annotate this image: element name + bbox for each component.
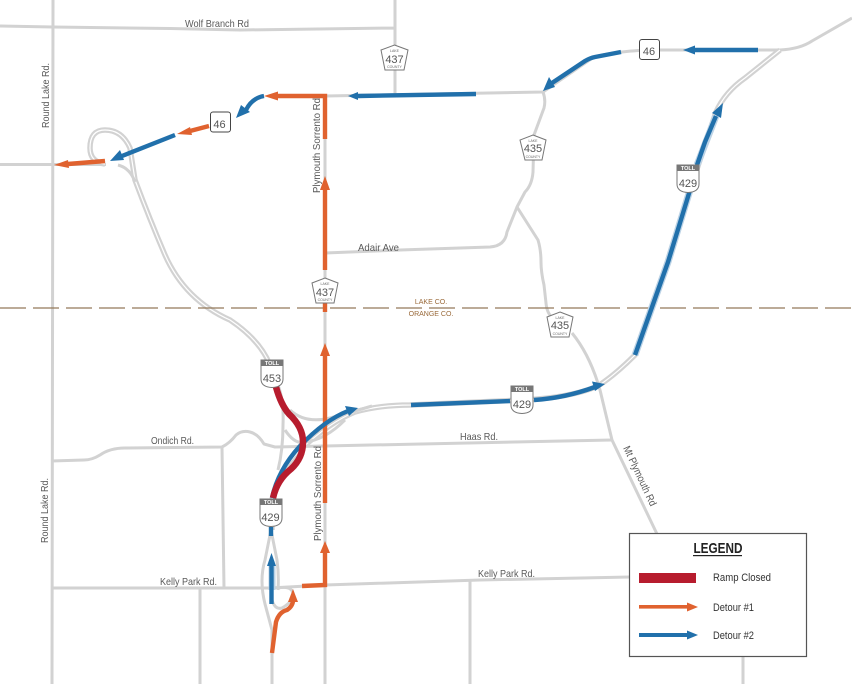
shield: SR 46 east: 46	[643, 46, 655, 58]
legend: detour 1: Detour #1	[713, 602, 754, 614]
road labels: Plymouth Sorrento Rd	[312, 446, 324, 541]
road labels: Wolf Branch Rd	[185, 18, 249, 30]
shield: 435 north	[520, 135, 546, 160]
shield: SR 46 west: 46	[213, 119, 226, 131]
shield: 435 north: 435	[524, 143, 542, 155]
shield: 437 south: 437	[316, 287, 334, 299]
road labels: Ondich Rd.	[151, 435, 194, 447]
county line label: Orange Co.: ORANGE CO.	[409, 311, 453, 318]
legend: ramp closed	[639, 572, 771, 584]
shield: toll 453	[261, 360, 283, 388]
shield: toll 429 northeast	[677, 165, 699, 192]
shield: toll 429 south: 429	[261, 512, 280, 524]
ramp closed route	[273, 387, 303, 498]
detour 1 route	[54, 92, 330, 653]
shield: toll 429 middle: TOLL	[515, 387, 530, 393]
shield: SR 46 west	[210, 112, 230, 132]
shield: toll 429 south: TOLL	[264, 500, 279, 506]
road labels: Round Lake Rd.	[39, 478, 51, 543]
legend: detour 2	[639, 630, 754, 642]
road labels: Kelly Park Rd.	[478, 568, 535, 580]
shield: toll 453: TOLL	[265, 361, 280, 367]
road labels: Kelly Park Rd.	[160, 576, 217, 588]
legend panel	[630, 534, 806, 656]
shield: toll 429 middle: 429	[513, 399, 531, 411]
shield: toll 429 northeast: TOLL	[681, 166, 696, 172]
legend heading: LEGEND	[694, 540, 743, 557]
shield: 435 south: COUNTY	[553, 332, 568, 336]
shield: toll 453: 453	[263, 373, 281, 385]
road labels: Round Lake Rd.	[40, 63, 52, 128]
road labels: Plymouth Sorrento Rd	[311, 98, 323, 193]
shield: 437 south: LAKE	[321, 282, 330, 286]
toll road ramps	[90, 50, 780, 684]
shield: 437 north: COUNTY	[387, 65, 403, 69]
shield: 435 south: LAKE	[556, 316, 565, 320]
shield: 437 north: 437	[385, 54, 404, 66]
shield: toll 429 middle	[511, 386, 533, 414]
shield: 435 north: LAKE	[529, 139, 538, 143]
road labels	[39, 18, 659, 588]
county line label: Lake Co.: LAKE CO.	[415, 299, 447, 306]
shield: 437 north: LAKE	[390, 49, 400, 53]
shield: toll 429 south	[260, 499, 282, 526]
shield: 435 south	[547, 312, 573, 337]
shield: 437 south	[312, 278, 338, 303]
shield: 437 south: COUNTY	[318, 298, 333, 302]
shield: 437 north	[381, 45, 408, 70]
detour 2 route	[110, 46, 758, 604]
legend: ramp closed: Ramp Closed	[713, 572, 771, 584]
legend: detour 2: Detour #2	[713, 630, 754, 642]
road labels: Mt Plymouth Rd	[620, 444, 659, 508]
shield: 435 south: 435	[551, 320, 569, 332]
road labels: Adair Ave	[358, 242, 399, 254]
road labels: Haas Rd.	[460, 431, 498, 443]
shield: toll 429 northeast: 429	[679, 178, 697, 190]
legend: detour 1	[639, 602, 754, 614]
shield: 435 north: COUNTY	[526, 155, 541, 159]
shield: SR 46 east	[640, 40, 660, 60]
